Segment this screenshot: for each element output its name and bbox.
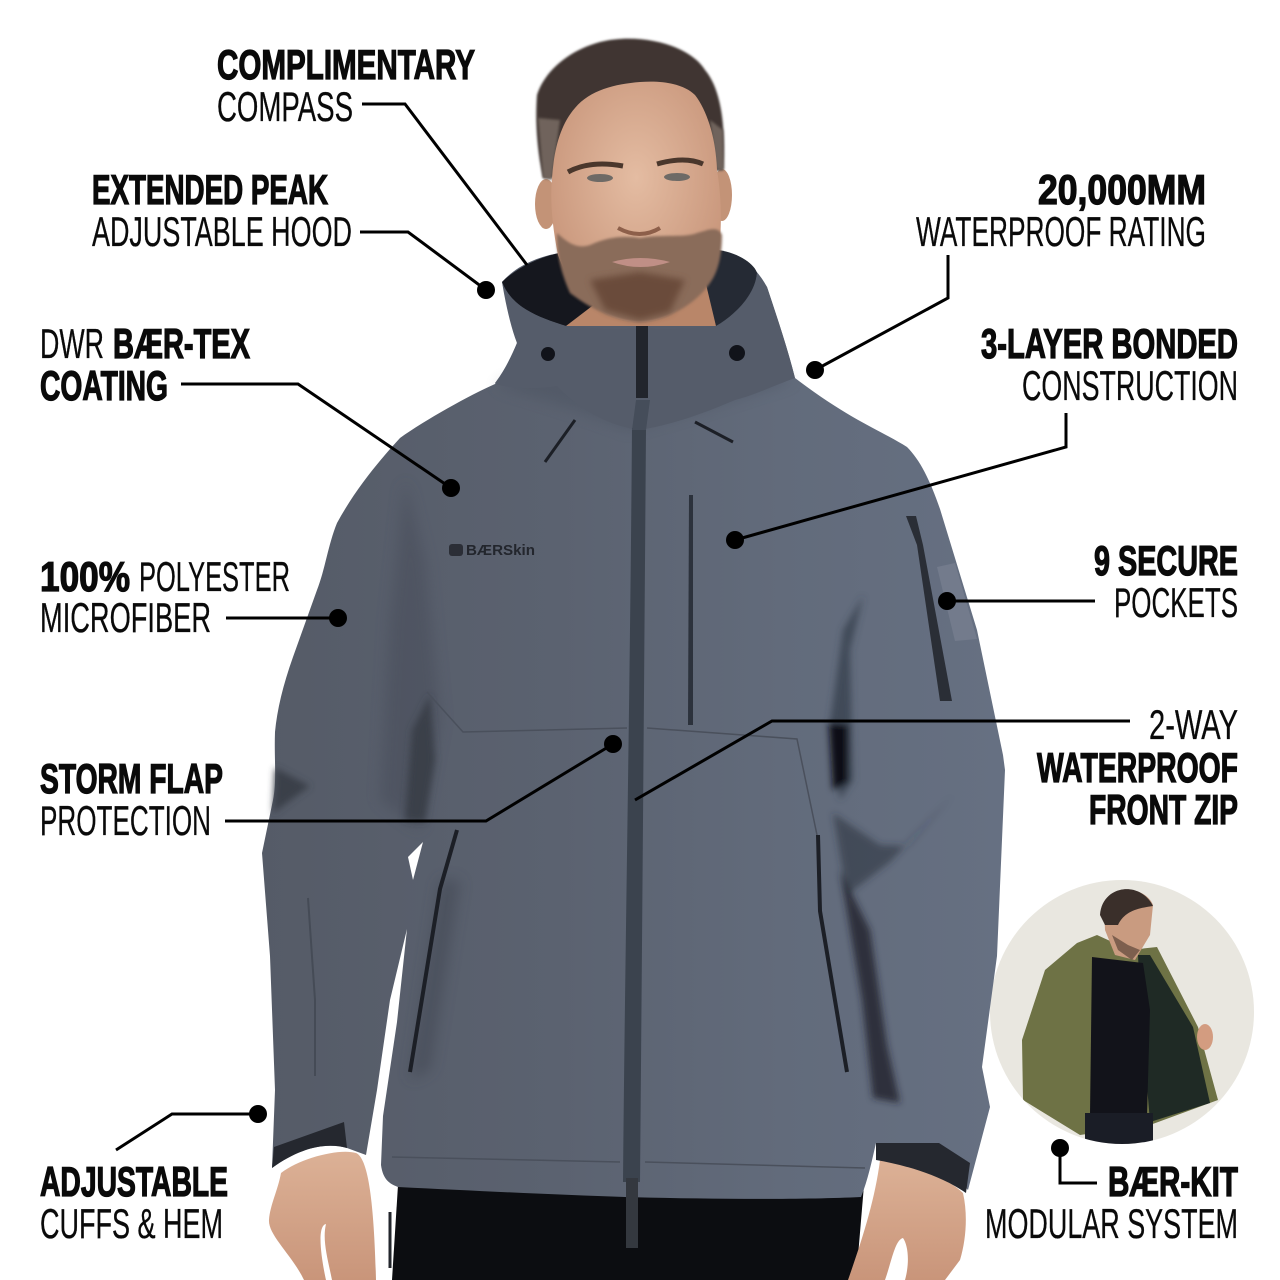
sleeve patch — [937, 563, 977, 641]
eyebrows — [568, 160, 703, 172]
callout: complimentary compass: COMPLIMENTARY — [217, 41, 475, 88]
eyes — [587, 173, 690, 182]
callout: 3-layer construction — [726, 320, 1238, 549]
hem seam — [392, 1157, 865, 1168]
callout: adjustable hood: EXTENDED PEAK — [92, 166, 328, 213]
beard — [557, 229, 722, 322]
callout: waterproof rating — [806, 166, 1206, 379]
inset hair — [1100, 889, 1153, 925]
hood back — [495, 252, 795, 420]
yoke seam — [427, 692, 817, 835]
callout: storm flap — [40, 735, 622, 844]
callout: modular system — [985, 1139, 1238, 1247]
inset trousers — [1085, 1113, 1153, 1144]
callout: complimentary compass: COMPASS — [217, 83, 353, 130]
sleeve vent — [308, 898, 315, 1076]
callout: polyester microfiber: MICROFIBER — [40, 594, 211, 641]
zip puller bottom — [626, 1178, 638, 1248]
brand logo — [449, 542, 535, 559]
trouser toggle — [388, 1212, 392, 1268]
right cuff — [876, 1143, 970, 1193]
hood lining right — [705, 250, 757, 326]
chin beard — [590, 272, 685, 320]
ears — [535, 169, 732, 229]
jacket silhouette — [262, 350, 1005, 1199]
main zipper — [623, 428, 646, 1182]
callout: polyester microfiber: POLYESTER — [139, 553, 290, 600]
callout: complimentary compass — [217, 41, 527, 265]
right hand — [848, 1160, 966, 1280]
collar front — [495, 273, 795, 430]
callout: front zip — [635, 701, 1238, 833]
chest pocket zip — [688, 495, 693, 725]
callout: adjustable hood — [92, 166, 495, 299]
callout: storm flap: PROTECTION — [40, 797, 211, 844]
callout: adjustable cuffs: ADJUSTABLE — [40, 1158, 228, 1205]
inset head — [1104, 890, 1153, 960]
nose — [618, 228, 660, 234]
collar snaps — [541, 345, 745, 361]
callout: storm flap: STORM FLAP — [40, 755, 223, 802]
callout: DWR coating: COATING — [40, 362, 168, 409]
callout: secure pockets — [938, 537, 1238, 626]
left hand — [269, 1152, 376, 1280]
drawcords — [545, 420, 733, 462]
inset green jacket — [1022, 935, 1218, 1135]
callout: DWR coating: BÆR-TEX — [113, 320, 250, 367]
callout: polyester microfiber — [40, 553, 347, 641]
inset lining — [1138, 955, 1210, 1122]
zip puller top — [636, 326, 648, 398]
hood lining — [502, 252, 600, 326]
callout: adjustable hood: ADJUSTABLE HOOD — [92, 208, 352, 255]
inset beard — [1112, 935, 1140, 960]
trousers — [392, 1185, 864, 1280]
logo mark — [449, 544, 463, 556]
left cuff — [272, 1122, 347, 1168]
neck — [565, 260, 716, 326]
jacket folds and shadows — [273, 340, 953, 1103]
face — [551, 82, 721, 322]
callout: DWR coating — [40, 320, 460, 497]
callout: adjustable cuffs — [40, 1105, 267, 1247]
inset circle: modular system — [1022, 889, 1218, 1148]
hair temple fade — [538, 118, 724, 180]
logo text: BÆRSkin — [466, 542, 535, 559]
callout: adjustable cuffs: CUFFS & HEM — [40, 1200, 223, 1247]
armpit gap — [408, 842, 423, 880]
inset hand — [1197, 1024, 1213, 1050]
mouth — [612, 258, 670, 267]
inset shirt — [1090, 957, 1150, 1115]
callout: waterproof rating: 20,000MM — [1038, 166, 1206, 213]
sleeve pocket zip — [906, 516, 952, 701]
callout: front zip: 2-WAY — [1149, 701, 1238, 748]
upper zipper — [632, 400, 650, 430]
callout: DWR coating: DWR — [40, 320, 104, 367]
inset backdrop behind sleeve — [990, 880, 1254, 1144]
callout: polyester microfiber: 100% — [40, 553, 130, 600]
hair base — [536, 39, 724, 178]
hand pocket zips — [410, 830, 847, 1072]
model wearing jacket — [262, 39, 1005, 1280]
